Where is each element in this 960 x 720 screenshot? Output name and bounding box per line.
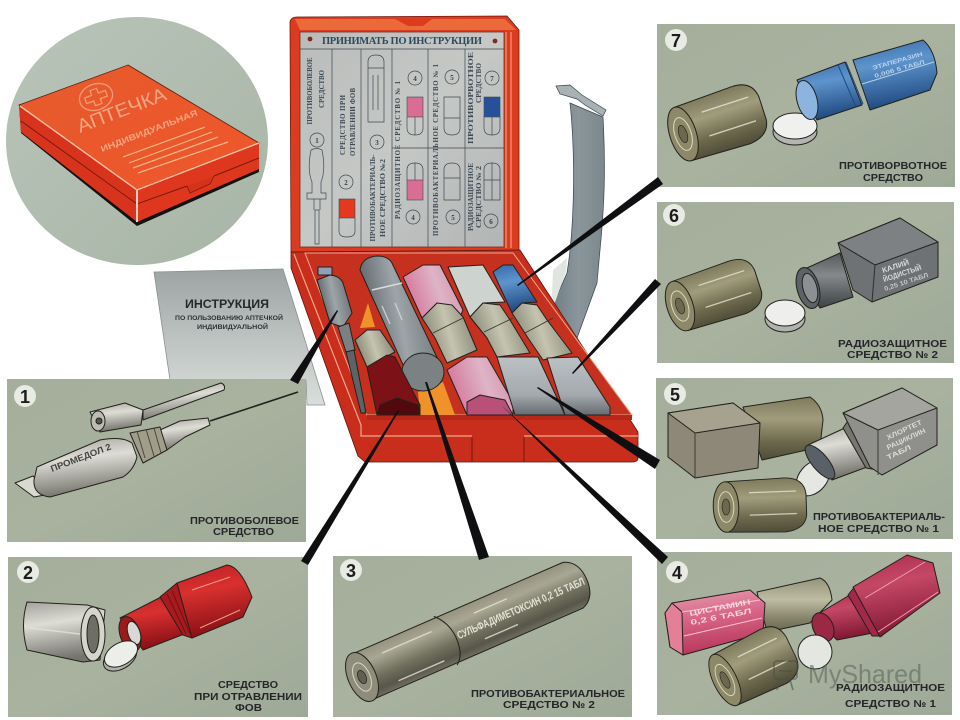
panel 3: antibacterial no. 2: 3	[346, 561, 356, 581]
instruction plate: ПРОТИВОБОЛЕВОЕ	[307, 57, 314, 124]
instruction plate: ПРОТИВОБАКТЕРИАЛЬНОЕ СРЕДСТВО № 1	[433, 63, 440, 236]
icon: syringe tube with needle	[15, 392, 298, 497]
kit lid: 6	[489, 218, 493, 226]
label: ФОВ	[235, 703, 262, 714]
label: СРЕДСТВО	[863, 173, 923, 184]
panel 5: antibacterial no. 1	[656, 378, 953, 539]
panel 6: radioprotector no. 2: 6	[669, 206, 679, 226]
icon: tablet	[798, 635, 832, 669]
label	[190, 516, 299, 538]
kit lid: 5	[450, 74, 454, 82]
panel 2: nerve agent antidote	[8, 557, 308, 717]
tray item: red capsule with grey cap	[355, 330, 420, 415]
icon: blue tube	[792, 40, 937, 122]
instruction sheet: ПО ПОЛЬЗОВАНИЮ АПТЕЧКОЙ	[175, 313, 283, 322]
panel 5: antibacterial no. 1: 5	[670, 385, 680, 405]
panel 7: antiemetic	[657, 24, 955, 187]
icon: closed orange kit box	[19, 65, 259, 226]
panel 1: painkiller syringe: 1	[20, 387, 30, 407]
icon: dark block tube	[792, 218, 938, 311]
arrow: item 3	[425, 382, 489, 560]
instruction sheet: ИНДИВИДУАЛЬНОЙ	[197, 322, 268, 331]
label: СРЕДСТВО № 1	[845, 699, 936, 710]
arrow: item 6	[572, 279, 661, 374]
instruction plate: ПРОТИВОБАКТЕРИАЛЬ-	[370, 154, 377, 242]
label: ПРОТИВОБАКТЕРИАЛЬ-	[813, 512, 945, 523]
icon: tablet	[765, 300, 805, 332]
label	[838, 339, 947, 361]
arrow: item 1	[290, 310, 338, 384]
label: РАДИОЗАЩИТНОЕ	[838, 339, 947, 350]
instruction plate: СРЕДСТВО ПРИ	[340, 94, 347, 155]
label: ПРОТИВОРВОТНОЕ	[839, 161, 947, 172]
tray item: light grey block	[547, 357, 610, 415]
icon: olive cap	[701, 621, 804, 712]
panel 3: antibacterial no. 2	[333, 555, 632, 717]
kit lid: 4	[413, 75, 417, 83]
instruction plate: РАДИОЗАЩИТНОЕ	[468, 163, 475, 231]
box title text: АПТЕЧКА	[74, 84, 170, 138]
tray item: white block capsule	[448, 265, 530, 357]
label	[194, 680, 302, 714]
orange lining	[360, 303, 455, 415]
label: СРЕДСТВО	[218, 680, 278, 691]
icon: dark block tube: КАЛИЙ	[881, 258, 910, 275]
panel 7: antiemetic: 7	[671, 31, 681, 51]
arrow: item 2	[301, 410, 399, 565]
icon: silver block tube: ТАБЛ	[886, 444, 913, 462]
instruction plate: НОЕ СРЕДСТВО №2	[380, 158, 387, 237]
icon: large tube	[338, 555, 597, 707]
panel 4: radioprotector no. 1: 4	[672, 563, 682, 583]
box title text	[74, 84, 199, 154]
icon: dark block tube: 0,25 10 ТАБЛ	[883, 272, 930, 293]
tray item: blue capsule	[493, 265, 572, 360]
kit lid: 5	[451, 214, 455, 222]
instruction plate: РАДИОЗАЩИТНОЕ СРЕДСТВО № 1	[395, 80, 402, 219]
icon: olive cap	[712, 477, 807, 534]
panel 4: radioprotector no. 1	[657, 552, 952, 715]
instruction plate: СРЕДСТВО	[319, 70, 326, 108]
label: СРЕДСТВО	[213, 527, 274, 538]
instruction plate: ПРОТИВОРВОТНОЕ	[468, 51, 475, 144]
icon: silver block tube: РАЦИКЛИН	[886, 428, 927, 452]
instruction sheet: ИНСТРУКЦИЯ	[185, 297, 269, 311]
panel: closed first-aid kit in circle	[6, 17, 268, 265]
icon: grey cap	[24, 602, 105, 662]
icon: red tube	[115, 565, 252, 654]
tray item: grey tube, antidote	[360, 256, 444, 391]
icon: olive cap	[661, 80, 772, 167]
label: НОЕ СРЕДСТВО № 1	[818, 524, 940, 535]
tray item: grey block	[497, 357, 565, 415]
panel 6: radioprotector no. 2	[657, 202, 954, 363]
icon: syringe cap and pin	[90, 383, 225, 432]
panel 1: painkiller syringe	[7, 379, 306, 542]
box title text: ИНДИВИДУАЛЬНАЯ	[99, 108, 199, 154]
tray item: lower pink capsule	[447, 357, 513, 415]
panel 2: nerve agent antidote: 2	[23, 563, 33, 583]
tube inscription: СУЛЬФАДИМЕТОКСИН 0,2 15 ТАБЛ	[455, 576, 587, 642]
kit lid: 4	[411, 214, 415, 222]
instruction plate: ПРИНИМАТЬ ПО ИНСТРУКЦИИ	[322, 36, 482, 47]
icon: tablet	[773, 113, 817, 145]
kit lid: 7	[490, 75, 494, 83]
icon: tablet	[789, 454, 837, 502]
label: РАДИОЗАЩИТНОЕ	[836, 683, 945, 694]
icon: syringe tube with needle: ПРОМЕДОЛ 2	[49, 442, 112, 474]
kit lid	[290, 16, 519, 252]
arrow: item 5	[537, 387, 660, 469]
icon: blue tube: 0,006 5 ТАБЛ	[874, 60, 926, 80]
label	[471, 689, 625, 711]
icon: olive cap	[659, 254, 767, 336]
icon: silver block tube: ХЛОРТЕТ	[886, 419, 924, 442]
arrow: item 4	[500, 404, 668, 564]
icon: block capsule with cap	[668, 397, 823, 478]
label	[839, 161, 947, 184]
label: ПРОТИВОБОЛЕВОЕ	[190, 516, 299, 527]
icon: pink capsule with cap: ЦИСТАМИН	[689, 597, 751, 618]
instruction plate: СРЕДСТВО	[476, 63, 483, 103]
arrow: item 7	[517, 177, 663, 286]
instruction sheet	[154, 269, 325, 405]
leader lines	[290, 177, 668, 565]
tray item: syringe tube	[317, 267, 366, 413]
icon: cross emblem	[76, 79, 116, 115]
kit lid: 3	[375, 139, 379, 147]
grey strap	[552, 85, 606, 338]
watermark: MyShared	[808, 659, 922, 689]
instruction plate	[300, 32, 504, 247]
label	[836, 683, 945, 710]
icon: white tablet	[99, 635, 142, 677]
kit lid: 2	[344, 179, 348, 187]
icon: crimson tube	[808, 555, 940, 645]
kit base tray	[291, 250, 638, 462]
label: СРЕДСТВО № 2	[847, 350, 938, 361]
label	[813, 512, 945, 535]
icon: dark block tube: ЙОДИСТЫЙ	[882, 263, 923, 284]
icon: silver block tube	[800, 388, 937, 483]
label: СРЕДСТВО № 2	[503, 700, 596, 711]
icon: pink capsule with cap: 0,2 6 ТАБЛ	[690, 606, 752, 627]
label: ПРИ ОТРАВЛЕНИИ	[194, 692, 302, 703]
open first-aid kit	[290, 16, 638, 462]
plate capsule colours	[339, 97, 500, 218]
instruction plate: ОТРАВЛЕНИИ ФОВ	[350, 88, 357, 156]
icon: blue tube: ЭТАПЕРАЗИН	[872, 52, 924, 72]
kit lid: 1	[315, 137, 319, 145]
icon: pink capsule with cap	[665, 578, 832, 655]
label: ПРОТИВОБАКТЕРИАЛЬНОЕ	[471, 689, 625, 700]
tray item: upper pink capsule	[403, 265, 477, 363]
instruction plate: СРЕДСТВО № 2	[476, 165, 483, 228]
